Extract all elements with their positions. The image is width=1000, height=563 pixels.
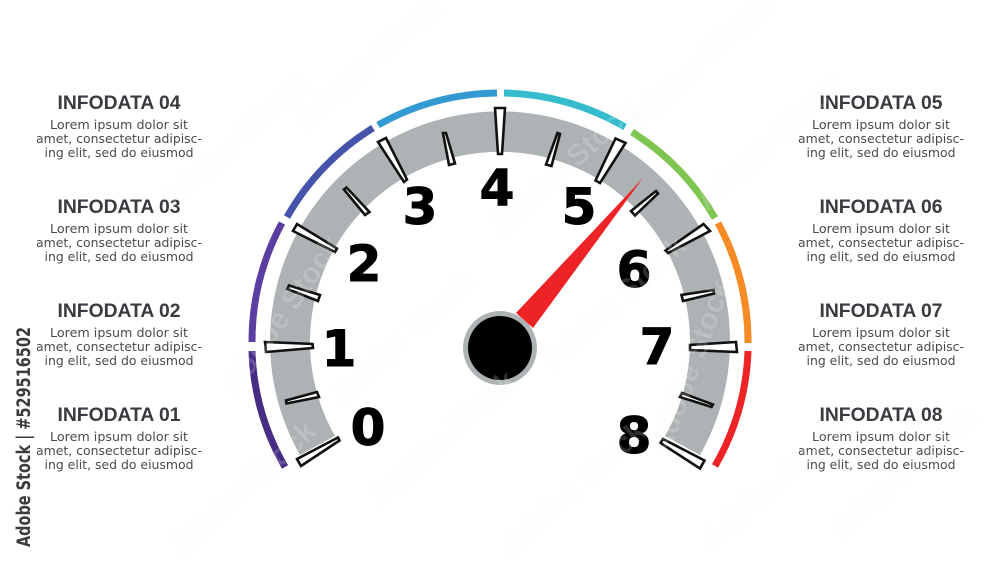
watermark pattern: Adobe Stock bbox=[364, 364, 523, 512]
text block: infodata 06: Lorem ipsum dolor sit bbox=[812, 221, 950, 236]
text block: infodata 02 bbox=[36, 301, 202, 368]
watermark pattern: Adobe Stock bbox=[824, 399, 983, 547]
text block: infodata 08: ing elit, sed do eiusmod bbox=[806, 457, 956, 472]
arc segment 3 bbox=[287, 128, 373, 217]
text block: infodata 07: ing elit, sed do eiusmod bbox=[806, 353, 956, 368]
grey dial band bbox=[270, 111, 730, 455]
number 1: 1 bbox=[322, 320, 356, 378]
number 8: 8 bbox=[617, 407, 651, 465]
text block: infodata 02: INFODATA 02 bbox=[58, 301, 180, 322]
coloured outer arc bbox=[252, 93, 748, 467]
text block: infodata 04: ing elit, sed do eiusmod bbox=[44, 145, 194, 160]
text block: infodata 06: ing elit, sed do eiusmod bbox=[806, 249, 956, 264]
text block: infodata 03 bbox=[36, 197, 202, 264]
text block: infodata 08: amet, consectetur adipisc- bbox=[798, 443, 964, 458]
text block: infodata 07: Lorem ipsum dolor sit bbox=[812, 325, 950, 340]
arc segment 2 bbox=[252, 223, 282, 342]
text block: infodata 05: Lorem ipsum dolor sit bbox=[812, 117, 950, 132]
text block: infodata 04 bbox=[36, 93, 202, 160]
text block: infodata 02: amet, consectetur adipisc- bbox=[36, 339, 202, 354]
text block: infodata 08 bbox=[798, 405, 964, 472]
watermark pattern: Adobe Stock bbox=[694, 409, 853, 557]
text block: infodata 04: INFODATA 04 bbox=[58, 93, 181, 114]
number 0: 0 bbox=[351, 399, 385, 457]
watermark pattern: Adobe Stock bbox=[689, 69, 848, 217]
arc segment 1 bbox=[252, 351, 285, 467]
text block: infodata 03: amet, consectetur adipisc- bbox=[36, 235, 202, 250]
text block: infodata 07 bbox=[798, 301, 964, 368]
text block: infodata 07: amet, consectetur adipisc- bbox=[798, 339, 964, 354]
arc segment 4 bbox=[378, 93, 497, 125]
watermark pattern: Adobe Stock bbox=[324, 264, 483, 412]
hub bbox=[463, 311, 537, 385]
watermark pattern: Adobe Stock bbox=[644, 275, 738, 459]
red needle bbox=[516, 178, 643, 328]
right column labels bbox=[798, 93, 964, 472]
watermark pattern: Adobe Stock bbox=[216, 230, 348, 399]
watermark pattern: Adobe Stock bbox=[494, 414, 653, 562]
text block: infodata 05 bbox=[798, 93, 964, 160]
number 3: 3 bbox=[403, 178, 437, 236]
text block: infodata 07: INFODATA 07 bbox=[820, 301, 942, 322]
arc segment 5 bbox=[504, 93, 625, 127]
text block: infodata 06 bbox=[798, 197, 964, 264]
text block: infodata 05: INFODATA 05 bbox=[820, 93, 943, 114]
number 5: 5 bbox=[562, 178, 596, 236]
left column labels bbox=[36, 93, 202, 472]
text block: infodata 01: amet, consectetur adipisc- bbox=[36, 443, 202, 458]
text block: infodata 03: ing elit, sed do eiusmod bbox=[44, 249, 194, 264]
scale numbers bbox=[322, 159, 674, 465]
arc segment 8 bbox=[715, 351, 748, 466]
number 2: 2 bbox=[347, 235, 381, 293]
text block: infodata 05: amet, consectetur adipisc- bbox=[798, 131, 964, 146]
text block: infodata 04: amet, consectetur adipisc- bbox=[36, 131, 202, 146]
watermark pattern: Adobe Stock bbox=[164, 414, 323, 562]
text block: infodata 03: Lorem ipsum dolor sit bbox=[50, 221, 188, 236]
text block: infodata 06: INFODATA 06 bbox=[820, 197, 942, 218]
text block: infodata 06: amet, consectetur adipisc- bbox=[798, 235, 964, 250]
number 6: 6 bbox=[617, 241, 651, 299]
text block: infodata 03: INFODATA 03 bbox=[58, 197, 180, 218]
text block: infodata 04: Lorem ipsum dolor sit bbox=[50, 117, 188, 132]
tick marks bbox=[265, 108, 737, 468]
watermark pattern: Adobe Stock bbox=[154, 69, 313, 217]
watermark pattern: Adobe Stock bbox=[534, 229, 693, 377]
text block: infodata 01: Lorem ipsum dolor sit bbox=[50, 429, 188, 444]
arc segment 7 bbox=[718, 223, 748, 343]
stock id vertical text: Adobe Stock | #529516502 bbox=[14, 327, 35, 547]
text block: infodata 08: INFODATA 08 bbox=[820, 405, 942, 426]
arc segment 6 bbox=[632, 132, 715, 218]
number 4: 4 bbox=[480, 159, 514, 217]
text block: infodata 02: Lorem ipsum dolor sit bbox=[50, 325, 188, 340]
text block: infodata 01: ing elit, sed do eiusmod bbox=[44, 457, 194, 472]
text block: infodata 01 bbox=[36, 405, 202, 472]
gauge bbox=[252, 93, 748, 468]
text block: infodata 05: ing elit, sed do eiusmod bbox=[806, 145, 956, 160]
text block: infodata 01: INFODATA 01 bbox=[58, 405, 181, 426]
text block: infodata 08: Lorem ipsum dolor sit bbox=[812, 429, 950, 444]
number 7: 7 bbox=[640, 318, 674, 376]
watermark pattern: Adobe Stock bbox=[484, 94, 643, 242]
text block: infodata 02: ing elit, sed do eiusmod bbox=[44, 353, 194, 368]
